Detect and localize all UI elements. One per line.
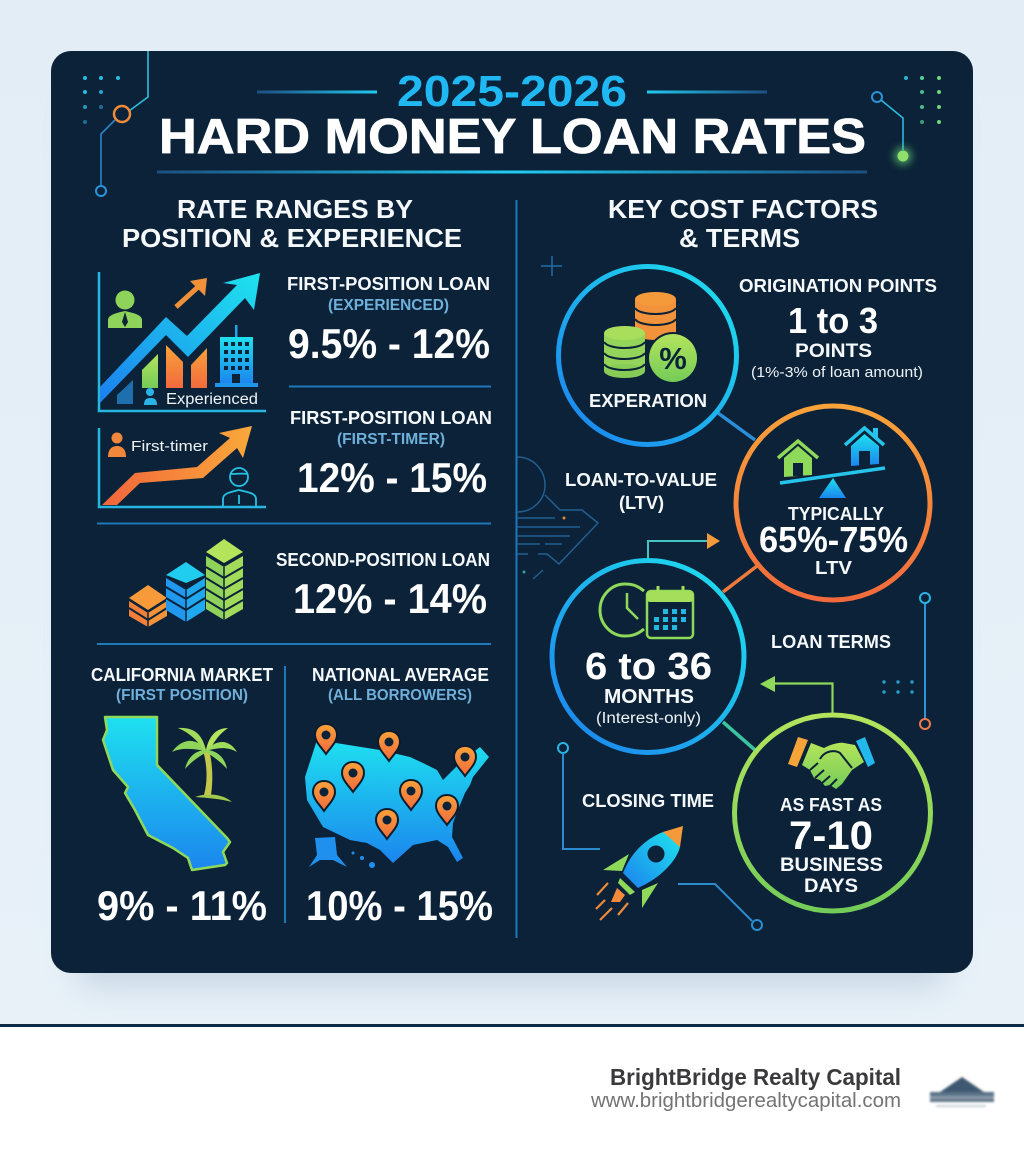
heading: rate ranges: POSITION & EXPERIENCE xyxy=(122,225,462,253)
text block: first-position experienced: 9.5% - 12% xyxy=(288,320,490,367)
label: closing time: CLOSING TIME xyxy=(582,791,714,811)
main dark panel xyxy=(51,51,973,973)
decoration: right pin line xyxy=(882,593,930,729)
heading: rate ranges xyxy=(122,196,462,253)
footer logo xyxy=(930,1077,994,1107)
label: loan terms: LOAN TERMS xyxy=(771,632,891,652)
arrow: closing to terms xyxy=(760,676,832,713)
decoration: top-right circuit xyxy=(872,76,941,165)
panel: loan term circle: (Interest-only) xyxy=(596,710,701,727)
title block xyxy=(157,67,867,174)
text block: first-position first-timer: 12% - 15% xyxy=(297,454,487,501)
text block: loan-to-value xyxy=(565,470,717,513)
text block: origination points: 1 to 3 xyxy=(788,300,878,341)
text block: california heading xyxy=(91,664,274,704)
text block: second-position xyxy=(276,549,490,622)
text block: loan-to-value: (LTV) xyxy=(619,493,664,513)
panel: origination points circle xyxy=(558,266,736,444)
icon: experienced growth chart xyxy=(99,272,266,411)
panel: LTV circle: LTV xyxy=(815,558,852,578)
arrow: months to LTV xyxy=(648,533,720,558)
text block: origination points: (1%-3% of loan amount) xyxy=(751,364,923,381)
icon: us map with pins xyxy=(305,724,489,868)
panel: closing time circle: AS FAST AS xyxy=(780,795,882,815)
icon: coins and percent: % xyxy=(659,341,687,376)
text block: national heading: (ALL BORROWERS) xyxy=(328,687,472,704)
decoration: schematic house xyxy=(517,457,598,579)
connector lines between circles xyxy=(718,413,757,750)
value: national rate: 10% - 15% xyxy=(306,882,493,929)
text block: first-position experienced xyxy=(287,273,490,367)
icon: stacked blocks xyxy=(129,539,243,627)
value: california rate: 9% - 11% xyxy=(97,882,267,929)
text block: first-position first-timer: (FIRST-TIMER) xyxy=(337,431,445,448)
icon: balance houses xyxy=(778,428,885,498)
text block: california heading: (FIRST POSITION) xyxy=(116,687,248,704)
panel: LTV circle: 65%-75% xyxy=(759,519,908,560)
icon: handshake xyxy=(788,737,875,789)
icon: rocket xyxy=(596,826,683,920)
footer brand text: www.brightbridgerealtycapital.com xyxy=(590,1090,901,1112)
text block: california heading: CALIFORNIA MARKET xyxy=(91,664,274,685)
footer band xyxy=(0,1024,1024,1154)
panel: closing time circle: BUSINESS xyxy=(780,855,883,876)
text block: first-position first-timer xyxy=(290,407,492,501)
footer brand text: BrightBridge Realty Capital xyxy=(610,1064,901,1090)
icon: clock and calendar xyxy=(600,584,693,638)
footer brand text xyxy=(590,1064,901,1112)
panel: closing time circle: 7-10 xyxy=(789,814,873,858)
decoration: lower circuit lines xyxy=(558,743,762,930)
text block: first-position experienced: FIRST-POSITION LOAN xyxy=(287,273,490,294)
panel shadow xyxy=(75,90,949,988)
heading: key cost factors xyxy=(608,196,878,253)
panel: closing time circle xyxy=(734,715,930,911)
icon: first-timer growth chart: First-timer xyxy=(131,438,208,455)
title block: 2025-2026 xyxy=(397,67,627,116)
panel: loan term circle: 6 to 36 xyxy=(585,646,712,688)
text block: loan-to-value: LOAN-TO-VALUE xyxy=(565,470,717,490)
panel: closing time circle: DAYS xyxy=(804,876,858,897)
text block: origination points xyxy=(739,276,937,381)
text block: national heading xyxy=(312,664,489,704)
icon: coins and percent xyxy=(604,292,699,384)
panel: origination points circle: EXPERATION xyxy=(589,390,707,411)
text block: first-position experienced: (EXPERIENCED) xyxy=(328,297,449,314)
decoration: plus mark xyxy=(541,256,562,276)
heading: key cost factors: KEY COST FACTORS xyxy=(608,196,878,224)
text block: first-position first-timer: FIRST-POSITION LOAN xyxy=(290,407,492,428)
icon: first-timer growth chart xyxy=(99,426,266,507)
heading: rate ranges: RATE RANGES BY xyxy=(177,196,413,224)
text block: second-position: 12% - 14% xyxy=(293,575,487,622)
text block: origination points: POINTS xyxy=(795,341,872,362)
icon: palm tree xyxy=(172,728,237,802)
text block: origination points: ORIGINATION POINTS xyxy=(739,276,937,296)
text block: national heading: NATIONAL AVERAGE xyxy=(312,664,489,685)
title block: HARD MONEY LOAN RATES xyxy=(159,110,866,164)
text block: second-position: SECOND-POSITION LOAN xyxy=(276,549,490,570)
panel: LTV circle xyxy=(736,406,930,600)
icon: experienced growth chart: Experienced xyxy=(166,391,258,408)
heading: key cost factors: & TERMS xyxy=(679,225,800,253)
panel: loan term circle: MONTHS xyxy=(604,686,694,708)
icon: california map xyxy=(103,717,230,870)
panel: LTV circle: TYPICALLY xyxy=(788,504,884,524)
decoration: top-left circuit xyxy=(83,51,148,196)
panel: loan term circle xyxy=(552,560,744,752)
